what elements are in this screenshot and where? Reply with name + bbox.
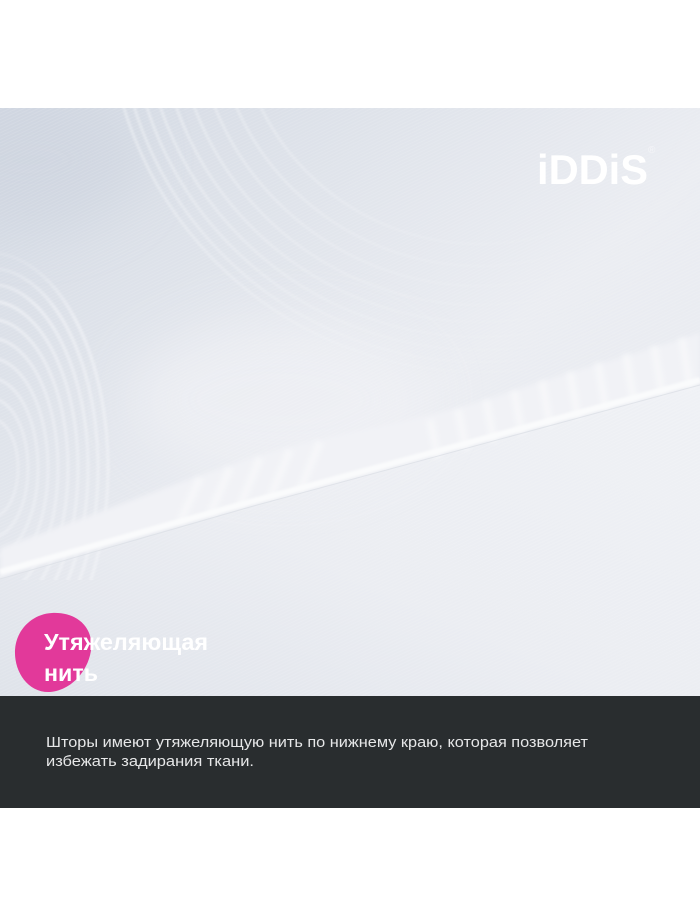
description text: избежать задирания ткани. [46,753,254,770]
infographic canvas [0,108,700,808]
fabric weave texture [0,108,700,696]
logo: IDDIS: iDDiS [537,146,648,193]
pink blob accent [15,613,91,692]
fabric pattern: large concentric arcs [122,108,221,218]
heading [44,629,208,686]
description text: Шторы имеют утяжеляющую нить по нижнему краю, которая позволяет [46,734,588,751]
heading: Утяжеляющая [44,629,208,655]
weighted hem tube [0,333,700,579]
fabric pattern: left concentric rings [0,284,108,446]
description text [46,734,588,770]
hem seam [0,380,700,572]
logo: IDDIS: ® [648,145,656,156]
heading: нить [44,660,98,686]
photo: white curtain fabric [0,108,700,696]
dark description panel [0,696,700,808]
